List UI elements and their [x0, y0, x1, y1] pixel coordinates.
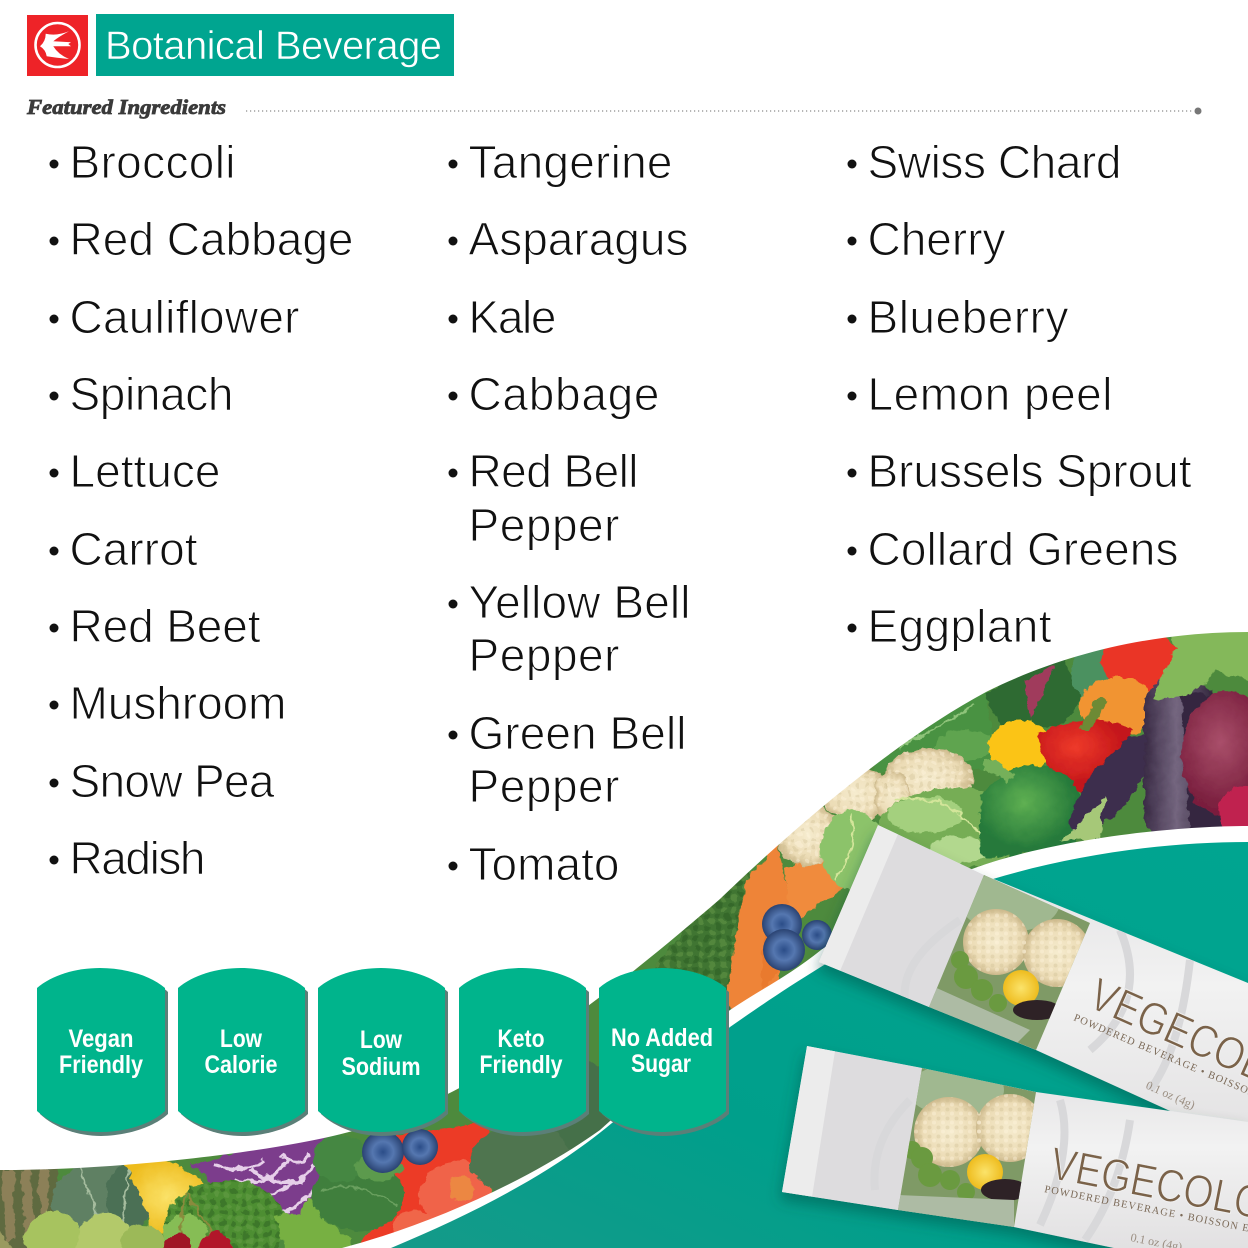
orange [1080, 677, 1156, 737]
green pepper [978, 760, 1082, 858]
greens behind badges [469, 984, 732, 1192]
ingredient column 3: Eggplant [868, 600, 1052, 652]
badge: low sodium: Sodium [342, 1053, 420, 1081]
ingredient column 3: Swiss Chard [868, 136, 1122, 188]
cauliflower [777, 748, 973, 866]
title banner: Botanical Beverage [105, 24, 442, 68]
lemon [124, 1161, 204, 1234]
red cabbage [190, 1137, 327, 1215]
ingredient column 3: Blueberry [868, 291, 1068, 343]
dotted rule [246, 108, 1202, 114]
badge: low calorie: Low [220, 1025, 262, 1053]
peas [275, 1198, 350, 1248]
dark leaves [900, 703, 990, 761]
teal background wave [391, 842, 1248, 1248]
ingredient column 1 [50, 136, 354, 884]
ingredient column 2: Pepper [468, 629, 620, 681]
blueberries lower [362, 1129, 438, 1173]
ingredient column 3 [848, 136, 1192, 652]
badge: keto friendly: Friendly [480, 1051, 563, 1079]
ingredient column 2: Cabbage [468, 368, 660, 420]
ingredient column 1: Radish [70, 832, 206, 884]
pouch 1 [819, 825, 1248, 1147]
badge: no added sugar: Sugar [631, 1050, 691, 1078]
ingredient column 2: Pepper [468, 760, 620, 812]
chard and cabbage leaf [986, 649, 1108, 728]
pouch 2 [782, 1046, 1248, 1248]
eggplants [1068, 678, 1222, 832]
cherries [164, 1192, 231, 1248]
asparagus [0, 1160, 58, 1248]
badge: vegan friendly [37, 968, 168, 1136]
ingredient column 2: Kale [468, 291, 556, 343]
pouch 2 seal area [782, 1046, 922, 1210]
lettuce [820, 788, 1031, 890]
leaf on eggplant [1062, 620, 1248, 842]
badge: keto friendly [459, 968, 589, 1136]
badge: no added sugar [599, 968, 729, 1136]
ingredient column 2: Green Bell [468, 707, 686, 759]
red pepper [1038, 695, 1132, 795]
pouch 2 swirl [1036, 1099, 1134, 1242]
badge: vegan friendly: Vegan [68, 1025, 134, 1053]
carrots [725, 842, 842, 1012]
leafy greens lower left [50, 1165, 149, 1229]
tomato top [1100, 637, 1178, 692]
featured ingredients heading: Featured Ingredients [26, 95, 226, 119]
ingredient column 2: Tangerine [468, 136, 672, 188]
badge: low sodium [318, 968, 448, 1136]
spinach [312, 1134, 404, 1231]
ingredient column 1: Mushroom [70, 677, 286, 729]
ingredient column 2: Yellow Bell [468, 576, 690, 628]
parsley [163, 1180, 285, 1248]
ingredient column 2: Red Bell [468, 445, 638, 497]
brussels sprouts [24, 1211, 165, 1248]
pouch 1 size: 0.1 oz (4g) [1144, 1078, 1197, 1112]
beet [1181, 691, 1248, 838]
badge: low calorie: Calorie [204, 1051, 278, 1079]
blueberries upper [762, 904, 832, 971]
ingredient column 3: Lemon peel [868, 368, 1112, 420]
ingredient column 1: Snow Pea [70, 755, 275, 807]
title banner [96, 14, 454, 76]
pouch 1 swirl [905, 920, 1190, 1090]
pouch 1 seal area [819, 825, 984, 1007]
pouch 1 seal ribbing [819, 825, 898, 971]
pouch 1 vegetable window [929, 875, 1090, 1050]
badge: no added sugar: No Added [611, 1024, 713, 1052]
ingredient column 3: Collard Greens [868, 523, 1178, 575]
badge: keto friendly: Keto [498, 1025, 544, 1053]
ingredient column 3: Brussels Sprout [868, 445, 1192, 497]
pouch 2 vegetable window [890, 1060, 1050, 1235]
broccoli [655, 872, 750, 984]
ingredient column 1: Lettuce [70, 445, 220, 497]
ingredient column 2 [448, 136, 690, 890]
badge: low calorie [178, 968, 308, 1136]
vegetable band [0, 600, 1248, 1248]
ingredient column 1: Red Cabbage [70, 213, 354, 265]
ingredient column 1: Cauliflower [70, 291, 300, 343]
ingredient column 1: Red Beet [70, 600, 261, 652]
header logo [27, 15, 88, 76]
ingredient column 2: Tomato [468, 838, 620, 890]
pouch 2 seal ribbing [782, 1046, 835, 1197]
ingredient column 1: Broccoli [70, 136, 236, 188]
badge: vegan friendly: Friendly [59, 1051, 143, 1079]
tomato [360, 1123, 492, 1243]
ingredient column 2: Asparagus [468, 213, 688, 265]
yellow pepper [988, 720, 1052, 772]
ingredient column 2: Pepper [468, 499, 620, 551]
ingredient column 3: Cherry [868, 213, 1006, 265]
ingredient column 1: Carrot [70, 523, 198, 575]
ingredient column 1: Spinach [70, 368, 234, 420]
badge: low sodium: Low [360, 1026, 402, 1054]
